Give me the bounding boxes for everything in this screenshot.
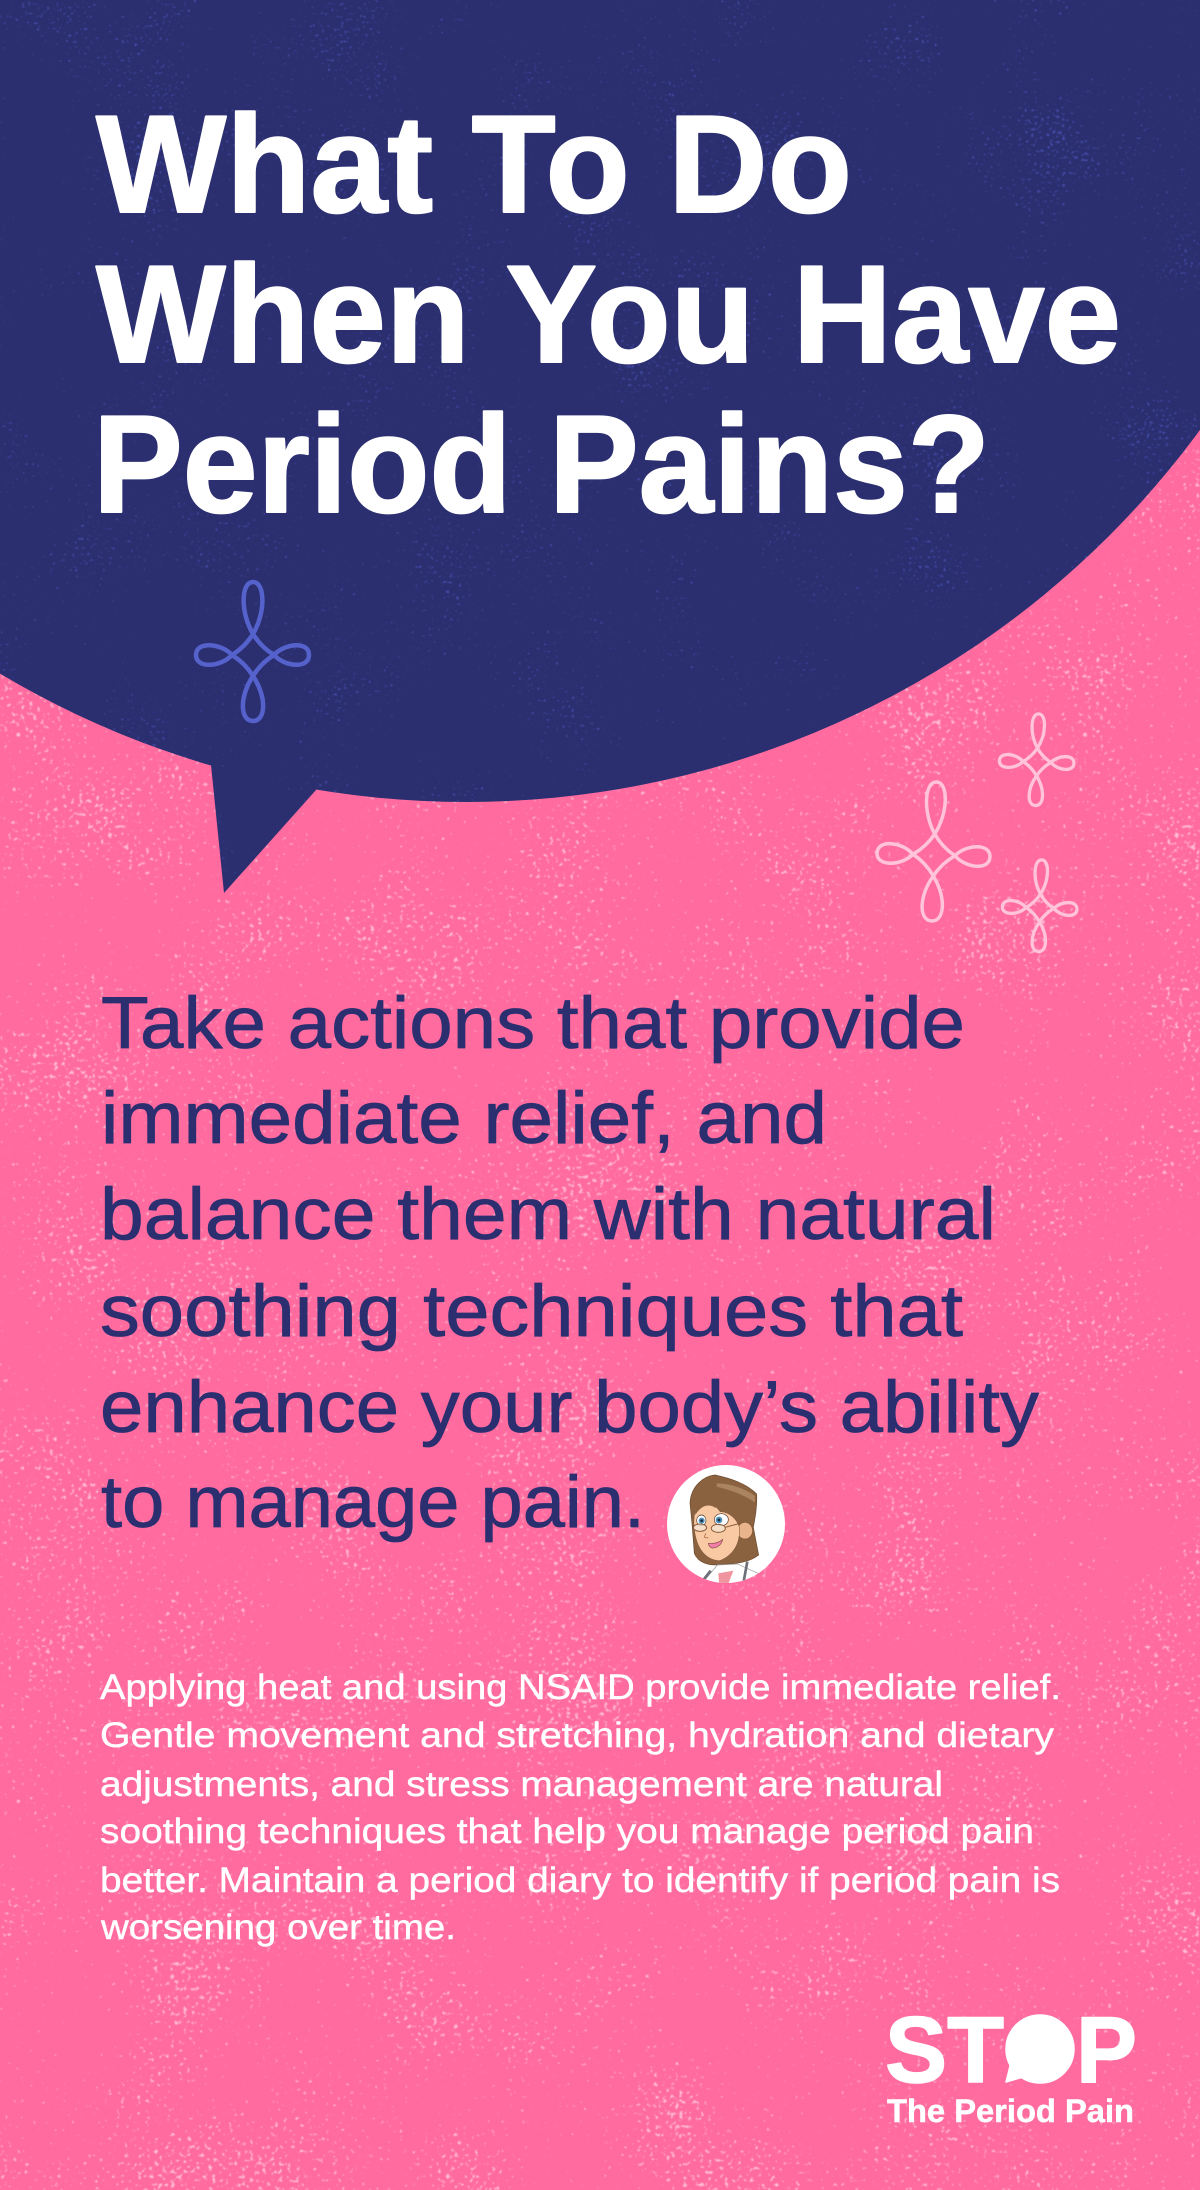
supporting paragraph: Applying heat and using NSAID provide immediate relief.: [100, 1668, 1061, 1707]
supporting paragraph: better. Maintain a period diary to identify if period pain is: [100, 1861, 1060, 1900]
speech bubble panel: [0, 0, 1200, 900]
logo: STOP The Period Pain: [885, 1997, 1137, 2129]
icon: doctor avatar: [667, 1465, 785, 1588]
logo: STOP The Period Pain: ST: [885, 1997, 1004, 2102]
icons: pink sparkles: [875, 713, 1079, 953]
logo: STOP The Period Pain: P: [1076, 1997, 1137, 2102]
title: [93, 87, 1121, 542]
icon: blue sparkle in bubble: [196, 582, 309, 721]
title: When You Have: [96, 237, 1121, 392]
supporting paragraph: worsening over time.: [100, 1908, 456, 1947]
key message text: soothing techniques that: [100, 1271, 963, 1352]
key message text: to manage pain.: [101, 1462, 645, 1543]
logo: STOP The Period Pain: The Period Pain: [887, 2093, 1134, 2129]
supporting paragraph: Gentle movement and stretching, hydration and dietary: [100, 1716, 1055, 1755]
title: Period Pains?: [93, 387, 990, 542]
key message text: immediate relief, and: [101, 1078, 827, 1159]
supporting paragraph: [100, 1668, 1061, 1947]
key message text: [100, 983, 1040, 1543]
key message text: Take actions that provide: [101, 983, 965, 1064]
title: What To Do: [96, 87, 852, 242]
key message text: balance them with natural: [100, 1174, 996, 1255]
supporting paragraph: soothing techniques that help you manage period pain: [100, 1812, 1034, 1851]
key message text: enhance your body’s ability: [100, 1367, 1040, 1448]
supporting paragraph: adjustments, and stress management are natural: [100, 1765, 943, 1804]
